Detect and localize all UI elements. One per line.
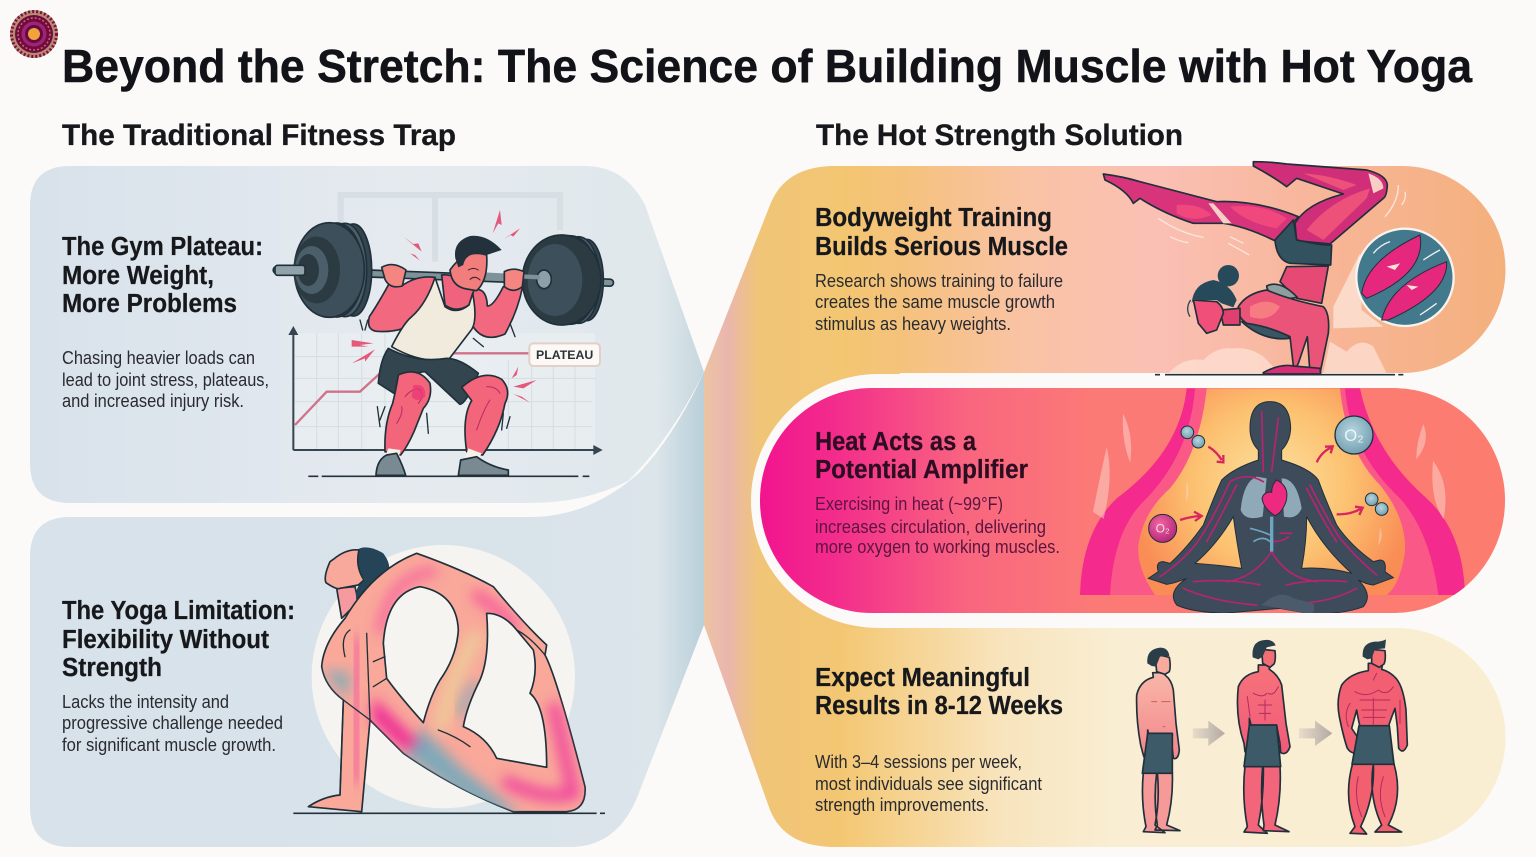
panel: heat amplifier <box>760 388 1505 614</box>
heat body text: Exercising in heat (~99°F) <box>815 494 1003 514</box>
meditating body <box>1148 402 1393 614</box>
heading: right column: The Hot Strength Solution <box>816 119 1183 152</box>
motion lines <box>1158 185 1405 255</box>
panel: gold connector band <box>704 166 900 847</box>
results body text <box>815 752 1042 815</box>
figure: starting physique <box>1137 648 1180 833</box>
oxygen molecule pair: upper left <box>1181 426 1205 448</box>
heat heading: Heat Acts as a <box>815 428 977 456</box>
bodyweight body text: Research shows training to failure <box>815 271 1063 291</box>
title: Beyond the Stretch: The Science of Building Muscle with Hot Yoga <box>62 40 1472 92</box>
gym plateau body text: Chasing heavier loads can <box>62 348 255 368</box>
lifter figure <box>369 236 524 475</box>
plateau label <box>529 343 600 366</box>
bodyweight body text <box>815 271 1063 334</box>
yoga ground line <box>293 811 605 816</box>
results heading <box>815 664 1063 720</box>
bodyweight heading: Builds Serious Muscle <box>815 233 1068 261</box>
oxygen molecule: lower left: O₂ <box>1156 522 1170 536</box>
results body text: most individuals see significant <box>815 774 1042 794</box>
arrow <box>1299 721 1332 746</box>
results body text: strength improvements. <box>815 795 989 815</box>
yoga limitation heading <box>62 597 295 682</box>
heat body text <box>815 494 1060 557</box>
flames <box>1080 388 1465 595</box>
yoga limitation heading: Strength <box>62 654 162 682</box>
results heading: Expect Meaningful <box>815 664 1030 692</box>
oxygen molecule: upper right <box>1335 416 1373 454</box>
bodyweight heading <box>815 204 1068 261</box>
bodyweight heading: Bodyweight Training <box>815 204 1052 232</box>
oxygen flow arrows <box>1180 446 1363 521</box>
results body text: With 3–4 sessions per week, <box>815 752 1022 772</box>
white ring around heat panel <box>751 374 1536 628</box>
icon: mandala logo <box>10 10 58 58</box>
figure: muscular physique <box>1338 639 1407 834</box>
ground line <box>308 474 589 479</box>
yoga limitation body text: for significant muscle growth. <box>62 735 276 755</box>
results heading: Results in 8-12 Weeks <box>815 692 1063 720</box>
plateau line <box>295 353 530 425</box>
heart <box>1262 480 1287 516</box>
muscle closeup inset <box>1356 229 1454 326</box>
gym plateau heading <box>62 233 263 318</box>
yoga limitation body text <box>62 692 283 755</box>
panel: gym plateau <box>30 166 704 503</box>
gym plateau body text <box>62 348 269 411</box>
illustration: meditating figure in flames with oxygen <box>1080 388 1465 614</box>
gym plateau body text: and increased injury risk. <box>62 391 244 411</box>
illustration: man squatting with barbell over plateau chart <box>275 195 610 476</box>
yoga limitation heading: Flexibility Without <box>62 626 269 654</box>
yoga limitation body text: progressive challenge needed <box>62 713 283 733</box>
heading: left column: The Traditional Fitness Trap <box>62 119 456 152</box>
heat heading: Potential Amplifier <box>815 456 1028 484</box>
heat heading <box>815 428 1028 484</box>
oxygen molecule pair: right <box>1365 493 1388 515</box>
arm balance ground line <box>1155 372 1403 377</box>
yoga limitation heading: The Yoga Limitation: <box>62 597 295 625</box>
heat body text: increases circulation, delivering <box>815 517 1046 537</box>
panel: yoga limitation <box>30 372 704 847</box>
gym plateau heading: More Problems <box>62 290 237 318</box>
illustration: body transformation progression <box>1137 639 1407 834</box>
chart axes <box>288 326 603 455</box>
lungs <box>1241 477 1302 518</box>
blood vessels <box>1160 412 1377 605</box>
yoga limitation body text: Lacks the intensity and <box>62 692 229 712</box>
pain bolts <box>352 210 537 433</box>
barbell <box>275 223 610 325</box>
illustration: muscular woman in arm balance <box>1103 162 1454 375</box>
heat body text: more oxygen to working muscles. <box>815 537 1060 557</box>
illustration: woman in deep backbend pose <box>293 545 605 817</box>
gym plateau heading: The Gym Plateau: <box>62 233 263 261</box>
arrow <box>1193 721 1225 746</box>
gym plateau body text: lead to joint stress, plateaus, <box>62 370 269 390</box>
oxygen molecule: upper right: O₂ <box>1344 426 1364 445</box>
oxygen molecule: lower left <box>1149 514 1177 542</box>
gym plateau heading: More Weight, <box>62 262 214 290</box>
panel: bodyweight training <box>815 162 1506 375</box>
figure: midway physique <box>1237 640 1290 833</box>
bodyweight body text: stimulus as heavy weights. <box>815 314 1011 334</box>
bodyweight body text: creates the same muscle growth <box>815 292 1055 312</box>
panel: expect results <box>815 628 1505 847</box>
plateau label: PLATEAU <box>536 348 593 362</box>
